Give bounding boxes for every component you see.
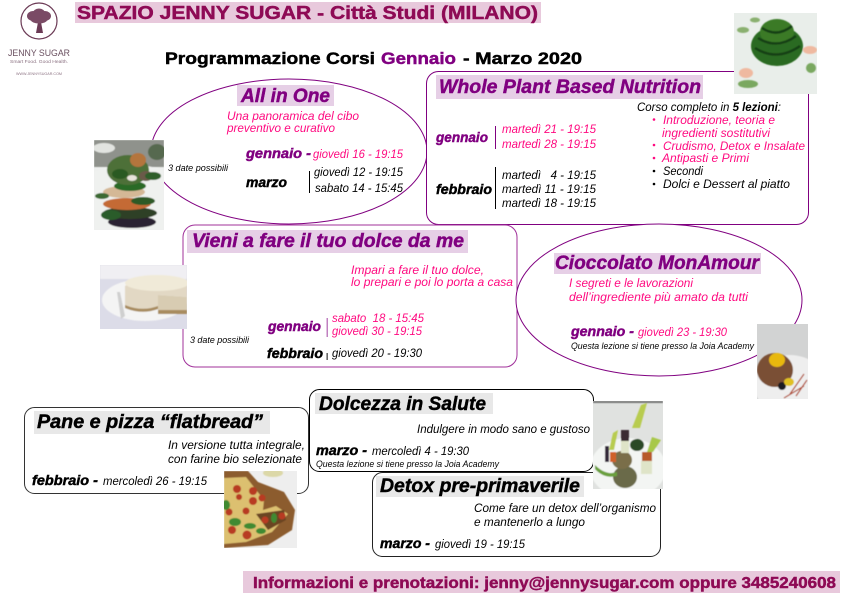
- logo: Jenny Sugar: [8, 3, 70, 76]
- dates: gennaio: gennaio: [435, 130, 488, 145]
- dates: gennaio -: [245, 146, 312, 161]
- heading: Whole Plant Based Nutrition: Whole Plant Based Nutrition: [439, 77, 701, 98]
- text: description: Una panoramica del cibo: [227, 109, 359, 123]
- dates: giovedì 16 - 19:15: [313, 147, 403, 161]
- dates: Questa lezione si tiene presso la Joia Academy: [316, 459, 500, 470]
- text: description: e mantenerlo a lungo: [474, 515, 585, 529]
- dates: sabato 14 - 15:45: [315, 181, 403, 195]
- text: 3 date possibili: 3 date possibili: [168, 163, 229, 174]
- text: description: Indulgere in modo sano e gustoso: [417, 422, 590, 436]
- dates: sabato 18 - 15:45: [332, 311, 424, 325]
- panel: Dolcezza in Salute: [310, 390, 594, 472]
- text: course list: Introduzione, teoria e: [663, 113, 775, 127]
- text: description: [226, 109, 359, 135]
- logo: Jenny Sugar: JENNY SUGAR: [8, 48, 70, 59]
- text: description: In versione tutta integrale,: [168, 438, 305, 452]
- image: cheesecake: [100, 265, 189, 329]
- text: description: lo prepari e poi lo porta a casa: [351, 275, 513, 289]
- dates: [316, 443, 500, 470]
- text: course list: Corso completo in 5 lezioni:: [637, 100, 781, 114]
- panel: Whole Plant Based Nutrition: [426, 72, 808, 224]
- panel: Vieni a fare il tuo dolce da me: [183, 225, 517, 367]
- image: chocolate dessert: [757, 324, 808, 399]
- logo: Jenny Sugar: WWW.JENNYSUGAR.COM: [16, 72, 62, 76]
- dates: febbraio: martedì 11 - 19:15: [502, 182, 596, 196]
- text: description: con farine bio selezionate: [168, 452, 302, 466]
- dates: mercoledì 26 - 19:15: [103, 474, 207, 488]
- text: course list: ingredienti sostitutivi: [662, 126, 770, 140]
- heading: Vieni a fare il tuo dolce da me: Vieni a fare il tuo dolce da me: [192, 231, 464, 252]
- text: description: [474, 501, 656, 529]
- dates: gennaio: martedì 21 - 19:15: [502, 122, 596, 136]
- dates: gennaio: [435, 122, 596, 151]
- dates: febbraio: febbraio: [436, 182, 492, 197]
- dates: [267, 311, 424, 361]
- dates: febbraio: [436, 167, 596, 210]
- heading: Dolcezza in Salute: Dolcezza in Salute: [319, 394, 486, 415]
- dates: giovedì 23 - 19:30: [638, 325, 727, 339]
- text: description: Impari a fare il tuo dolce,: [351, 263, 484, 277]
- title: programmazione corsi: [165, 49, 582, 68]
- text: course list: Antipasti e Primi: [661, 151, 749, 165]
- dates: giovedì 30 - 19:15: [332, 324, 422, 338]
- text: description: Come fare un detox dell’organismo: [474, 501, 656, 515]
- text: course list: Crudismo, Detox e Insalate: [663, 139, 805, 153]
- footer: contact banner: [243, 571, 840, 593]
- dates: marzo: [246, 175, 287, 190]
- heading: Detox pre-primaverile: Detox pre-primaverile: [380, 476, 580, 497]
- dates: [245, 146, 403, 195]
- panel: Detox pre-primaverile: [372, 472, 660, 556]
- image: pizza: [222, 469, 297, 548]
- header banner: SPAZIO JENNY SUGAR - Città Studi (MILANO): [77, 3, 538, 23]
- dates: febbraio: [267, 346, 323, 361]
- dates: marzo -: [316, 443, 368, 458]
- dates: [32, 473, 207, 488]
- text: 3 date possibili: 3 date possibili: [190, 335, 250, 346]
- dates: Questa lezione si tiene presso la Joia Academy: [571, 341, 755, 352]
- logo: Jenny Sugar: Smart Food. Good Health.: [10, 59, 68, 64]
- heading: Cioccolato MonAmour: Cioccolato MonAmour: [555, 253, 761, 274]
- dates: giovedì 19 - 19:15: [435, 537, 525, 551]
- dates: febbraio: martedì 4 - 19:15: [502, 168, 596, 182]
- dates: giovedì 20 - 19:30: [332, 346, 422, 360]
- dates: gennaio -: [570, 324, 635, 339]
- text: description: dell’ingrediente più amato da tutti: [569, 290, 748, 304]
- panel: Cioccolato MonAmour: [516, 224, 802, 376]
- text: description: [168, 438, 305, 466]
- image: vegetable rolls: [593, 401, 663, 489]
- dates: marzo -: [380, 536, 431, 551]
- text: course list: Secondi: [663, 164, 703, 178]
- dates: mercoledì 4 - 19:30: [372, 444, 469, 458]
- panel: All in One: [151, 79, 427, 224]
- image: vegetable stack: [93, 140, 166, 230]
- text: course list: Dolci e Dessert al piatto: [663, 177, 790, 191]
- dates: [380, 536, 525, 551]
- heading: Pane e pizza flatbread: Pane e pizza “flatbread”: [37, 412, 264, 433]
- title: programmazione corsi: Gennaio: [381, 49, 456, 68]
- title: programmazione corsi: Programmazione Corsi: [165, 49, 375, 68]
- text: description: preventivo e curativo: [226, 121, 335, 135]
- dates: gennaio: martedì 28 - 19:15: [502, 137, 596, 151]
- dates: febbraio: martedì 18 - 19:15: [502, 196, 596, 210]
- dates: gennaio: [267, 319, 321, 334]
- image: green spaghetti: [734, 13, 817, 94]
- heading: All in One: All in One: [240, 86, 330, 107]
- text: description: [351, 263, 513, 289]
- dates: giovedì 12 - 19:15: [314, 165, 403, 179]
- text: description: I segreti e le lavorazioni: [569, 276, 693, 290]
- text: course list: [637, 100, 805, 191]
- panel: Pane e pizza flatbread: [24, 408, 308, 494]
- footer: contact banner: Informazioni e prenotazioni: jenny@jennysugar.com oppure 3485240608: [253, 575, 836, 592]
- title: programmazione corsi: - Marzo 2020: [463, 49, 582, 68]
- dates: febbraio -: [32, 473, 99, 488]
- text: description: [569, 276, 748, 304]
- dates: [570, 324, 755, 352]
